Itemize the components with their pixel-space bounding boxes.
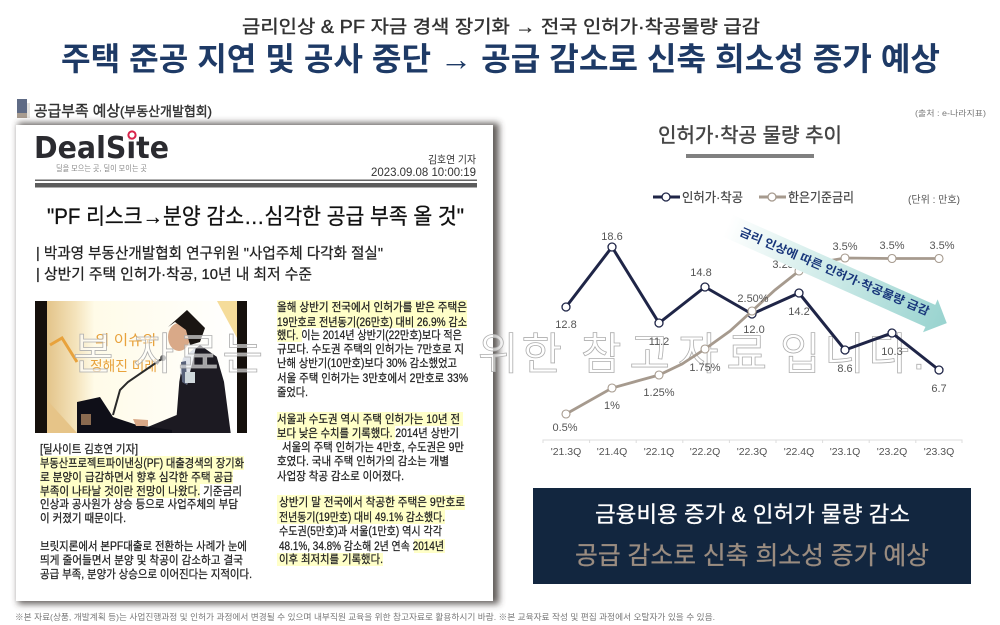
article body: right column: 사업장 착공 감소로 이어졌다. [277, 469, 404, 483]
article body: left column: 로 분양이 급감하면서 향후 심각한 주택 공급 [40, 470, 233, 484]
chart axis: '22.3Q [737, 446, 767, 458]
article body: right column: 48.1%, 34.8% 감소해 2년 연속 2014년 [279, 540, 444, 553]
article body: right column: 올해 상반기 전국에서 인허가를 받은 주택은 [277, 301, 467, 314]
article body: left column [40, 443, 252, 581]
series: 인허가·착공: 14.2 [788, 306, 810, 318]
series: 한은기준금리: 1.25% [643, 387, 675, 399]
article headline: "PF 리스크→분양 감소…심각한 공급 부족 올 것" [47, 204, 464, 229]
chart axis [543, 440, 962, 458]
subtitle line: 금리인상 & PF 자금 경색 장기화 → 전국 인허가·착공물량 급감 [242, 17, 760, 37]
chart axis: '23.1Q [830, 446, 860, 458]
article body: left column: 공급 부족, 분양가 상승으로 이어진다는 지적이다. [40, 568, 252, 581]
series: 인허가·착공: 12.0 [743, 324, 765, 336]
title [61, 17, 940, 77]
article body: left column: 이 커졌기 때문이다. [40, 511, 126, 525]
series: 한은기준금리: 1% [604, 400, 620, 412]
arrow: 금리 인상에 따른 급감: 금리 인상에 따른 인허가·착공물량 급감 [738, 225, 932, 319]
series: 한은기준금리: 1.75% [689, 362, 721, 374]
series: 인허가·착공: 6.7 [931, 383, 947, 395]
watermark: 참고자료 [581, 330, 767, 379]
chart heading: (출처 : e-나라지표) [915, 108, 986, 118]
article body: right column: 전년동기(19만호) 대비 49.1% 감소했다. [279, 511, 445, 524]
watermark: 입니다. [780, 330, 925, 379]
chart legend: 한은기준금리 [788, 190, 854, 205]
series: 인허가·착공: 12.8 [555, 319, 577, 331]
article body: right column: 수도권(5만호)과 서울(1만호) 역시 각각 [279, 525, 442, 538]
chart heading [658, 108, 986, 158]
chart legend [653, 190, 960, 206]
chart axis: '22.4Q [784, 446, 814, 458]
article body: left column: 인상과 공사원가 상승 등으로 사업주체의 부담 [40, 497, 238, 511]
chart axis: '22.2Q [690, 446, 720, 458]
article body: right column: 서울과 수도권 역시 주택 인허가는 10년 전 [277, 413, 460, 426]
photo: speaker at podium: 의 이슈와 [95, 332, 157, 348]
series: 한은기준금리: 3.5% [929, 240, 955, 252]
chart legend: 인허가·착공 [682, 190, 743, 205]
chart axis: '22.1Q [644, 446, 674, 458]
article body: right column: 19만호로 전년동기(26만호) 대비 26.9% 감소 [277, 316, 467, 329]
watermark [73, 330, 925, 379]
callout: conclusion box: 공급 감소로 신축 희소성 증가 예상 [575, 542, 929, 570]
article body: left column: [딜사이트 김호연 기자] [40, 443, 138, 456]
article body: left column: 부동산프로젝트파이낸싱(PF) 대출경색의 장기화 [40, 456, 244, 470]
chart axis: '21.4Q [597, 446, 627, 458]
series: 한은기준금리 [552, 240, 955, 434]
series: 한은기준금리: 0.5% [552, 422, 578, 434]
watermark: 위한 [478, 330, 562, 379]
chart axis: '23.3Q [924, 446, 954, 458]
article body: right column: 서울 주택 인허가는 3만호에서 2만호로 33% [277, 372, 468, 385]
main title line: 주택 준공 지연 및 공사 중단 → 공급 감소로 신축 희소성 증가 예상 [61, 41, 940, 77]
series: 한은기준금리: 3.5% [832, 241, 858, 253]
section heading: 공급부족 예상: (부동산개발협회) [120, 104, 212, 119]
series: 인허가·착공 [555, 231, 947, 395]
article body: right column [270, 298, 475, 583]
footnote: ※본 자료(상품, 개발계획 등)는 사업진행과정 및 인허가 과정에서 변경될 수 있으며 내부직원 교육을 위한 참고자료로 활용하시기 바람. ※본 교육자료 작성 및 편집 과정에서 오탈자가 있을 수 있음. [15, 612, 715, 622]
byline and date: 2023.09.08 10:00:19 [371, 167, 476, 179]
article body: right column: 난해 상반기(10만호)보다 30% 감소했었고 [277, 357, 457, 370]
logo: DealSite: DealSite [34, 131, 169, 166]
article subheads: | 상반기 주택 인허가·착공, 10년 내 최저 수준 [36, 266, 312, 283]
article body: left column: 부족이 나타날 것이란 전망이 나왔다. 기준금리 [40, 485, 242, 498]
photo: speaker at podium: 정해진 미래 [90, 358, 157, 374]
arrow: 금리 인상에 따른 급감 [720, 209, 954, 340]
article body: left column: 띄게 줄어들면서 분양 및 착공이 감소하고 결국 [40, 553, 243, 567]
logo: DealSite: 딜을 모으는 곳, 딜이 모이는 곳 [56, 163, 147, 173]
article body: right column: 했다. 이는 2014년 상반기(22만호)보다 적은 [277, 329, 462, 342]
panel: news article [16, 123, 499, 604]
article body: right column: 상반기 말 전국에서 착공한 주택은 9만호로 [279, 495, 465, 509]
series: 한은기준금리: 2.50% [737, 293, 769, 305]
article body: right column: 이후 최저치를 기록했다. [279, 553, 383, 566]
article subheads: | 박과영 부동산개발협회 연구위원 "사업주체 다각화 절실" [36, 245, 383, 262]
series: 한은기준금리: 3.25% [772, 259, 804, 271]
series: 인허가·착공: 10.3 [881, 346, 903, 358]
article subheads [36, 245, 383, 283]
article body: right column: 보다 낮은 수치를 기록했다. 2014년 상반기 [277, 427, 459, 440]
callout: conclusion box: 금융비용 증가 & 인허가 물량 감소 [595, 502, 910, 527]
article body: left column: 브릿지론에서 본PF대출로 전환하는 사례가 눈에 [40, 539, 247, 553]
article body: right column: 줄었다. [277, 386, 308, 399]
byline and date: 김호연 기자 [428, 154, 476, 166]
chart legend: (단위 : 만호) [908, 193, 960, 206]
byline and date [371, 154, 476, 179]
chart axis: '23.2Q [877, 446, 907, 458]
article body: right column: 규모다. 수도권 주택의 인허가는 7만호로 지 [277, 343, 464, 356]
series: 인허가·착공: 8.6 [837, 363, 853, 375]
article body: right column: 호였다. 국내 주택 인허가의 감소는 개별 [277, 455, 449, 468]
photo: speaker at podium [35, 301, 247, 433]
series: 인허가·착공: 14.8 [690, 267, 712, 279]
series: 한은기준금리: 3.5% [879, 240, 905, 252]
callout: conclusion box [533, 488, 971, 584]
section heading: 공급부족 예상: 공급부족 예상 [34, 103, 120, 120]
watermark: 본 자료는 [73, 330, 263, 379]
article body: right column: 서울의 주택 인허가는 4만호, 수도권은 9만 [282, 441, 464, 454]
section heading: 공급부족 예상 [17, 99, 212, 120]
chart heading: 인허가·착공 물량 추이 [658, 124, 842, 147]
series: 인허가·착공: 11.2 [649, 336, 669, 348]
chart axis: '21.3Q [551, 446, 581, 458]
line chart [543, 231, 962, 458]
series: 인허가·착공: 18.6 [601, 231, 623, 243]
watermark: 내부 교육 [300, 330, 450, 379]
